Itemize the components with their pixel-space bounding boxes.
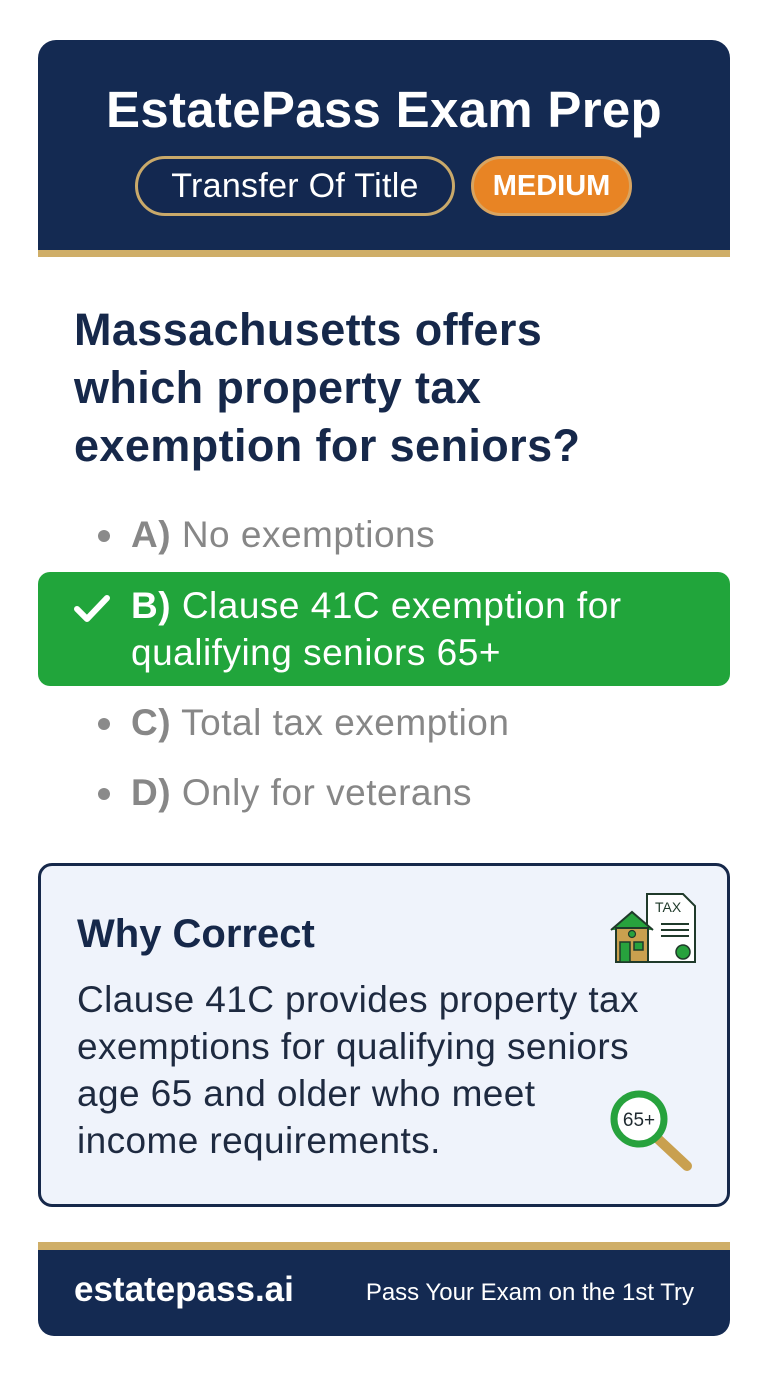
footer [38, 1242, 730, 1336]
header panel [38, 40, 730, 257]
difficulty pill [471, 156, 632, 216]
explanation: income requirements. [77, 1120, 441, 1161]
question [74, 304, 580, 471]
title: EstatePass Exam Prep [106, 81, 662, 138]
difficulty pill: MEDIUM [493, 170, 610, 202]
icon: magnifier 65+ [610, 1090, 692, 1171]
question: Massachusetts offers [74, 304, 542, 355]
correct answer text [131, 585, 622, 673]
question: exemption for seniors? [74, 420, 580, 471]
explanation: Clause 41C provides property tax [77, 979, 639, 1020]
topic pill: Transfer Of Title [171, 167, 419, 205]
option B correct [38, 572, 730, 686]
question: which property tax [74, 362, 481, 413]
panel: why correct [38, 863, 730, 1207]
icon: house with tax document [610, 893, 696, 963]
topic pill [135, 156, 455, 216]
explanation [77, 979, 639, 1161]
icon: house with tax document: TAX [655, 899, 682, 915]
icon: magnifier 65+: 65+ [623, 1110, 655, 1131]
explanation: age 65 and older who meet [77, 1073, 535, 1114]
correct answer text: B) Clause 41C exemption for [131, 585, 622, 626]
heading: Why Correct [77, 912, 315, 956]
correct answer text: qualifying seniors 65+ [131, 632, 501, 673]
option C: C) Total tax exemption [131, 702, 509, 743]
footer brand: estatepass.ai [74, 1270, 294, 1309]
explanation: exemptions for qualifying seniors [77, 1026, 629, 1067]
option A: A) No exemptions [131, 514, 435, 555]
icon: checkmark [74, 595, 110, 622]
option D: D) Only for veterans [131, 772, 472, 813]
footer tagline: Pass Your Exam on the 1st Try [366, 1279, 694, 1306]
